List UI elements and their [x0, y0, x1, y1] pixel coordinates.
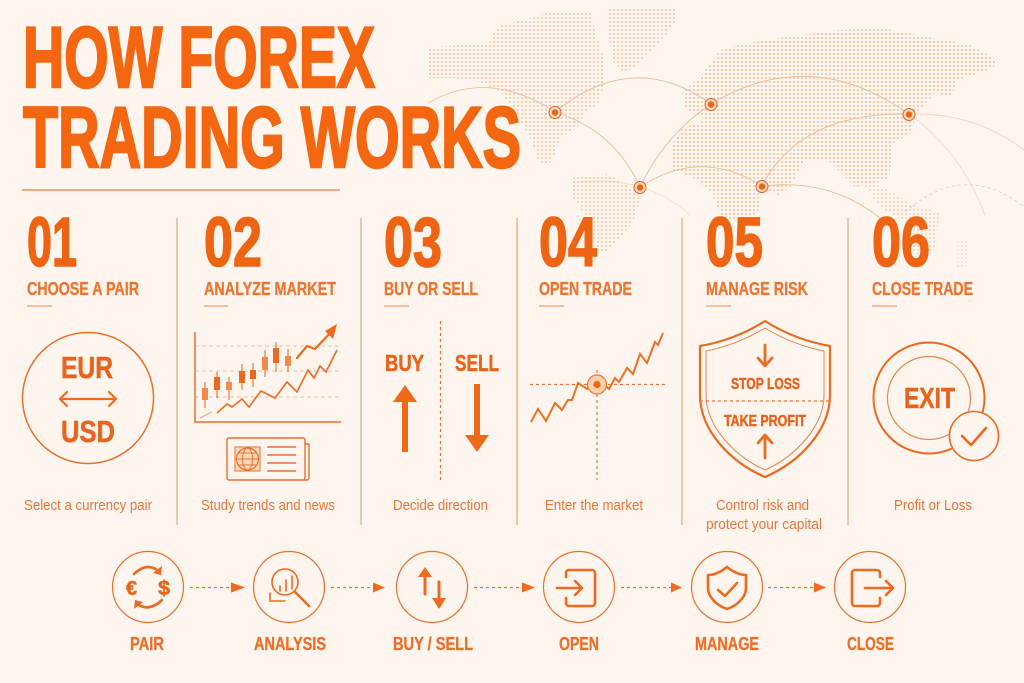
- flow step: pair: €: [126, 578, 137, 600]
- step number 04: 04: [539, 203, 597, 281]
- arrow: [474, 582, 535, 592]
- flow step: pair: PAIR: [130, 634, 164, 654]
- process flow row: [112, 552, 906, 654]
- title: HOW FOREX: [23, 10, 375, 106]
- description: Control risk and: [716, 498, 809, 514]
- icon: exit ring with check: EXIT: [904, 383, 955, 415]
- flow step: open: [544, 552, 614, 654]
- description: [706, 498, 822, 533]
- flow step: pair: $: [158, 578, 170, 600]
- map route arcs: [428, 76, 1024, 218]
- description: Profit or Loss: [894, 498, 972, 514]
- step number 02: 02: [204, 203, 262, 281]
- buy label and up arrow: BUY: [385, 350, 424, 376]
- icon: newspaper: [227, 438, 309, 480]
- step number 06: 06: [872, 203, 930, 281]
- icon: shield stop loss take profit: STOP LOSS: [731, 376, 800, 393]
- flow step: close: [834, 552, 906, 654]
- step number 03: 03: [384, 203, 442, 281]
- flow step: buy sell: [393, 552, 473, 654]
- title: TRADING WORKS: [23, 90, 521, 186]
- panel: 01 choose a pair: [22, 203, 154, 514]
- buy label and up arrow: [385, 350, 424, 452]
- title: [23, 10, 521, 186]
- sell label and down arrow: SELL: [455, 350, 499, 376]
- step number 01: 01: [27, 203, 77, 281]
- panel: 06 close trade: [872, 203, 998, 514]
- candlestick chart: [195, 324, 341, 422]
- arrow: [190, 582, 245, 592]
- description: protect your capital: [706, 517, 822, 533]
- icon: shield stop loss take profit: TAKE PROFIT: [724, 413, 806, 430]
- flow step: close: CLOSE: [847, 634, 894, 654]
- flow step: manage: MANAGE: [695, 634, 759, 654]
- flow step: open: OPEN: [559, 634, 599, 654]
- heading: manage risk: MANAGE RISK: [706, 279, 808, 299]
- map nodes: [549, 98, 915, 194]
- panel: 05 manage risk: [700, 203, 830, 533]
- arrow: [331, 582, 385, 592]
- description: Enter the market: [545, 498, 643, 514]
- flow step: manage: [692, 552, 762, 654]
- heading: buy or sell: BUY OR SELL: [384, 279, 478, 299]
- flow step: buy sell: BUY / SELL: [393, 634, 473, 654]
- icon: EUR USD circle: USD: [61, 414, 115, 449]
- icon: EUR USD circle: EUR: [61, 350, 113, 385]
- heading: analyze market: ANALYZE MARKET: [204, 279, 336, 299]
- flow step: pair: [112, 552, 184, 654]
- panel: 04 open trade: [530, 203, 665, 514]
- heading: close trade: CLOSE TRADE: [872, 279, 973, 299]
- flow step: analysis: ANALYSIS: [254, 634, 326, 654]
- line chart with entry target: [530, 333, 665, 480]
- description: Select a currency pair: [24, 498, 152, 514]
- description: Study trends and news: [201, 498, 335, 514]
- heading: choose a pair: CHOOSE A PAIR: [27, 279, 139, 299]
- arrow: [768, 582, 826, 592]
- icon: exit ring with check: [874, 342, 998, 460]
- panel: 02 analyze market: [195, 203, 341, 514]
- heading: open trade: OPEN TRADE: [539, 279, 632, 299]
- flow step: analysis: [254, 552, 326, 654]
- arrow: [621, 582, 682, 592]
- icon: EUR USD circle: [22, 332, 154, 464]
- icon: shield stop loss take profit: [700, 321, 830, 477]
- description: Decide direction: [393, 498, 488, 514]
- world map with dotted continents: [428, 7, 1024, 268]
- step number 05: 05: [706, 203, 763, 281]
- sell label and down arrow: [455, 350, 499, 452]
- panel: 03 buy or sell: [384, 203, 499, 514]
